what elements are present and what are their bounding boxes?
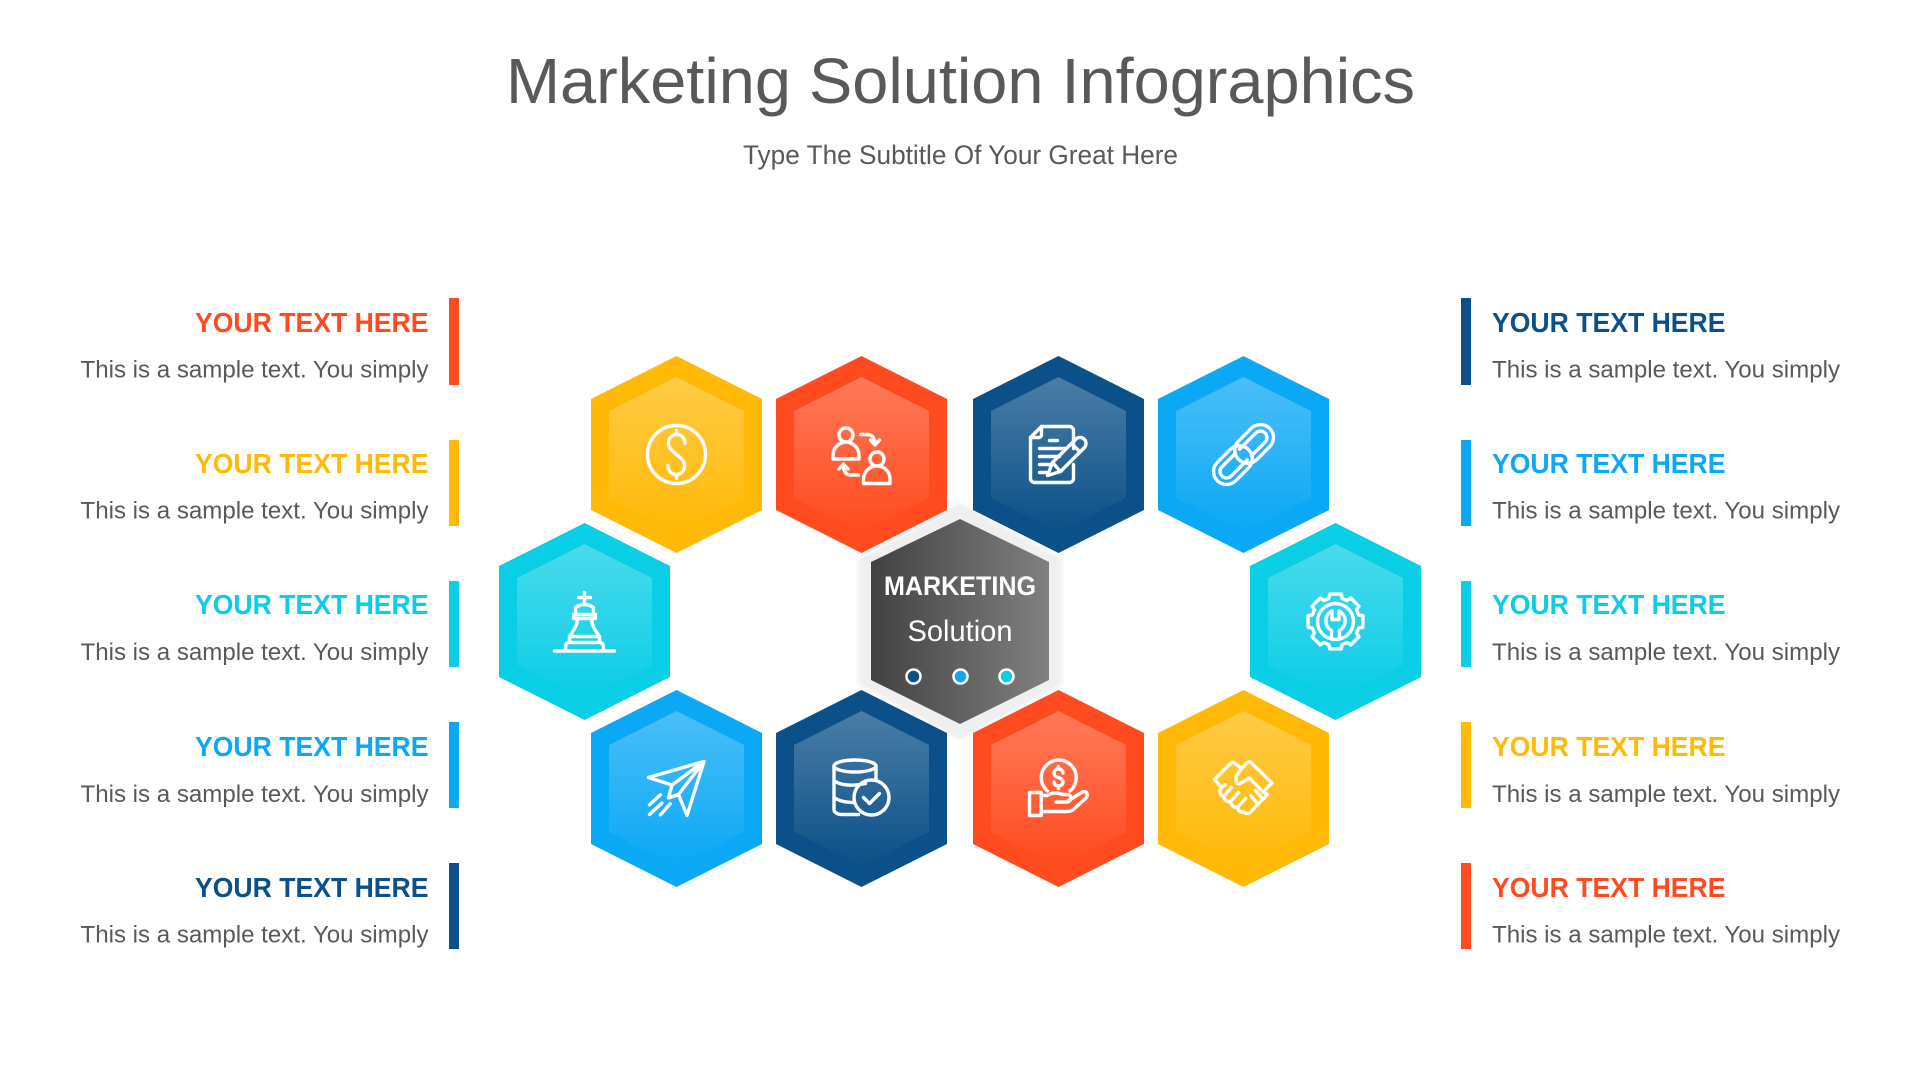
right item 5: This is a sample text. You simply xyxy=(1492,922,1840,948)
left column of text items xyxy=(80,298,459,949)
left item 2: This is a sample text. You simply xyxy=(80,498,428,524)
left item 4 xyxy=(80,722,459,808)
left item 3: YOUR TEXT HERE xyxy=(195,589,428,620)
icon: document and pencil xyxy=(1030,426,1086,482)
icon: database check xyxy=(834,760,889,815)
left item 1: YOUR TEXT HERE xyxy=(195,307,428,338)
icon: people exchange xyxy=(833,428,890,484)
right item 2 xyxy=(1461,440,1840,526)
icon: dollar coin xyxy=(648,426,706,484)
right column of text items xyxy=(1461,298,1840,949)
right item 3: YOUR TEXT HERE xyxy=(1492,589,1726,620)
hexagon: paper plane xyxy=(591,690,762,887)
left item 5: This is a sample text. You simply xyxy=(80,922,428,948)
right item 4 xyxy=(1461,722,1840,808)
subtitle: Type The Subtitle Of Your Great Here xyxy=(743,140,1178,170)
hexagon: chain link xyxy=(1158,356,1329,553)
center hexagon xyxy=(871,519,1049,724)
hexagon: hand with coin xyxy=(973,690,1144,887)
left item 5 xyxy=(80,863,459,949)
hexagon: chess king xyxy=(499,523,670,720)
left item 3 xyxy=(80,581,459,667)
title: Marketing Solution Infographics xyxy=(506,45,1415,117)
right item 3: This is a sample text. You simply xyxy=(1492,639,1840,666)
hexagon: document and pencil xyxy=(973,356,1144,553)
right item 1 xyxy=(1461,298,1840,385)
center dots xyxy=(906,670,1014,684)
left item 4: This is a sample text. You simply xyxy=(80,781,428,808)
icon: chain link xyxy=(1208,419,1279,490)
right item 2: YOUR TEXT HERE xyxy=(1492,448,1726,479)
hexagon: database check xyxy=(776,690,947,887)
center subheading: Solution xyxy=(908,615,1012,648)
right item 4: YOUR TEXT HERE xyxy=(1492,731,1726,762)
right item 2: This is a sample text. You simply xyxy=(1492,498,1840,524)
icon: handshake xyxy=(1214,762,1272,814)
left item 4: YOUR TEXT HERE xyxy=(195,731,428,762)
icon: hand with coin xyxy=(1030,760,1087,816)
left item 2: YOUR TEXT HERE xyxy=(195,448,428,479)
right item 1: YOUR TEXT HERE xyxy=(1492,307,1726,338)
icon: paper plane xyxy=(648,762,704,816)
right item 3 xyxy=(1461,581,1840,667)
hexagon: people exchange xyxy=(776,356,947,553)
icon: gear and wrench xyxy=(1308,594,1363,649)
hexagon: handshake xyxy=(1158,690,1329,887)
right item 5 xyxy=(1461,863,1840,949)
left item 1 xyxy=(80,298,459,385)
left item 1: This is a sample text. You simply xyxy=(80,356,428,384)
left item 3: This is a sample text. You simply xyxy=(80,639,428,666)
right item 5: YOUR TEXT HERE xyxy=(1492,872,1726,903)
icon: chess king xyxy=(554,592,614,651)
center heading: MARKETING xyxy=(884,571,1036,601)
hexagon: dollar coin xyxy=(591,356,762,553)
hexagon: gear and wrench xyxy=(1250,523,1421,720)
center hexagon halo xyxy=(858,503,1062,740)
right item 4: This is a sample text. You simply xyxy=(1492,781,1840,808)
left item 2 xyxy=(80,440,459,526)
left item 5: YOUR TEXT HERE xyxy=(195,872,428,903)
right item 1: This is a sample text. You simply xyxy=(1492,356,1840,384)
